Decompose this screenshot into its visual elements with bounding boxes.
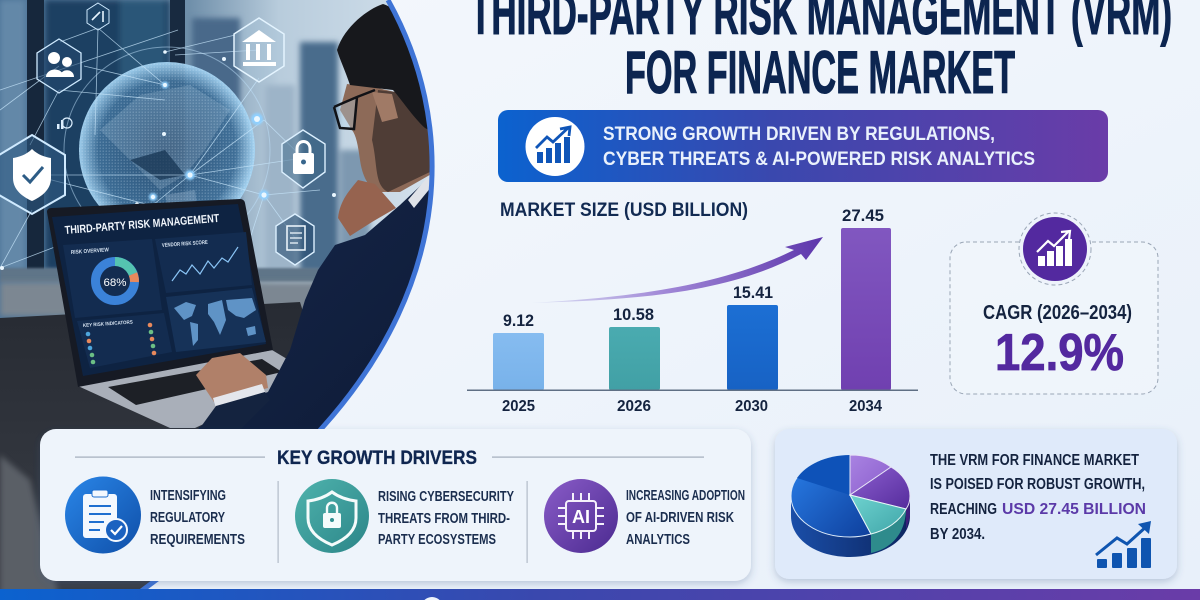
bar chart: market size: 2026 — [617, 398, 651, 415]
icon: rising bars — [1096, 521, 1151, 568]
icon: bank hexagon — [234, 18, 284, 82]
bar chart: market size — [467, 200, 918, 415]
panel: CAGR: CAGR (2026–2034) — [983, 302, 1132, 324]
growth arrow — [531, 237, 823, 303]
outlook text: BY 2034. — [930, 526, 985, 543]
icon: CAGR growth badge — [1019, 213, 1091, 285]
donut chart — [96, 262, 135, 300]
network lines and nodes — [0, 28, 320, 280]
bar chart: market size: 2025 — [502, 398, 535, 415]
icon: growth chart circle — [526, 117, 584, 176]
footer gradient bar — [0, 589, 1200, 600]
bar chart: market size: 9.12 — [503, 311, 534, 330]
driver: cybersecurity threats: PARTY ECOSYSTEMS — [378, 532, 496, 548]
panel: CAGR — [950, 213, 1158, 394]
driver: cybersecurity threats: RISING CYBERSECURITY — [378, 489, 514, 505]
driver: AI-driven analytics — [544, 479, 745, 553]
driver: regulatory requirements: REGULATORY — [150, 510, 225, 526]
banner: growth summary: STRONG GROWTH DRIVEN BY REGULATIONS, — [603, 124, 995, 145]
man in suit — [196, 4, 445, 440]
line chart — [172, 247, 238, 281]
icon: AI chip — [544, 479, 618, 553]
icon: small bar glyph — [57, 118, 72, 129]
banner: growth summary: CYBER THREATS & AI-POWERED RISK ANALYTICS — [603, 149, 1035, 170]
bar chart: market size: 15.41 — [733, 283, 773, 302]
glasses — [334, 90, 375, 129]
outlook text: USD 27.45 BILLION — [1002, 501, 1146, 518]
hand at chin — [338, 180, 396, 236]
icon: clipboard check — [65, 476, 141, 554]
typing hand — [196, 353, 268, 402]
outlook text: REACHING — [930, 501, 997, 518]
icon: shield lock — [295, 479, 369, 553]
bar chart: market size: 2030 — [735, 398, 768, 415]
icon: lock hexagon — [282, 130, 325, 188]
driver: AI-driven analytics: OF AI-DRIVEN RISK — [626, 510, 734, 526]
icon: people hexagon — [37, 39, 81, 93]
outlook text: THE VRM FOR FINANCE MARKET — [930, 452, 1139, 469]
banner: growth summary — [498, 110, 1108, 182]
glowing network nodes — [149, 82, 269, 201]
3D pie chart — [791, 455, 910, 557]
bar chart: market size: 10.58 — [613, 305, 654, 324]
driver: regulatory requirements: REQUIREMENTS — [150, 532, 245, 548]
outlook text: IS POISED FOR ROBUST GROWTH, — [930, 476, 1145, 493]
driver: regulatory requirements — [65, 476, 245, 554]
icon: AI chip: AI — [572, 507, 590, 527]
driver: cybersecurity threats — [295, 479, 514, 553]
photo: analyst at laptop with network overlay — [0, 0, 450, 600]
title — [470, 0, 1172, 106]
outlook text — [930, 452, 1146, 543]
world map — [174, 298, 256, 346]
laptop dashboard screen: RISK OVERVIEW — [71, 247, 110, 256]
chart heading: MARKET SIZE (USD BILLION) — [500, 200, 748, 221]
driver: regulatory requirements: INTENSIFYING — [150, 488, 226, 504]
icon: AI hexagon — [87, 3, 109, 30]
globe with dotted continents — [64, 46, 270, 215]
icon: shield hexagon — [0, 135, 65, 214]
driver: AI-driven analytics: INCREASING ADOPTION — [626, 488, 745, 504]
driver: AI-driven analytics: ANALYTICS — [626, 532, 690, 548]
panel: key growth drivers — [40, 429, 751, 581]
panel: market outlook — [775, 429, 1177, 579]
laptop — [47, 199, 292, 428]
panel: CAGR: 12.9% — [995, 324, 1124, 382]
drivers heading: KEY GROWTH DRIVERS — [277, 447, 477, 469]
risk list — [86, 323, 156, 364]
icon: clipboard hexagon — [276, 214, 314, 265]
curved blue photo border — [140, 0, 432, 592]
driver: cybersecurity threats: THREATS FROM THIRD- — [378, 511, 510, 527]
bar chart: market size: 27.45 — [842, 206, 884, 225]
bar chart: market size: 2034 — [849, 398, 882, 415]
donut chart: 68% — [104, 277, 127, 289]
laptop dashboard screen — [52, 204, 266, 376]
laptop dashboard screen: KEY RISK INDICATORS — [83, 319, 134, 329]
laptop dashboard screen: VENDOR RISK SCORE — [162, 240, 208, 249]
laptop dashboard screen: THIRD-PARTY RISK MANAGEMENT — [64, 213, 220, 237]
